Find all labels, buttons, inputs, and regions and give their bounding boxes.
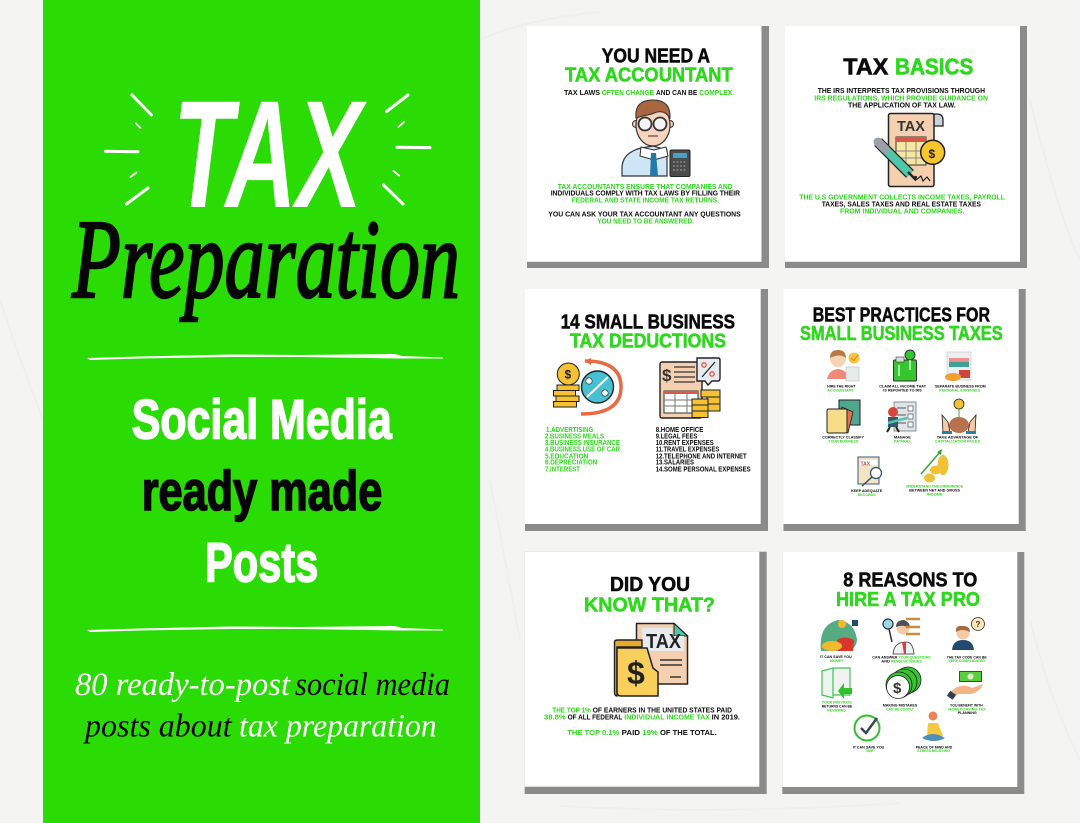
text: body copy: 38.8% [544, 713, 566, 722]
item: hire the right accountant: HIRE THE RIGHT [827, 383, 856, 388]
text: body copy: INDIVIDUAL INCOME TAX [624, 713, 710, 722]
item: can answer your questions: YOUR QUESTIONS [898, 654, 931, 659]
text: body paragraphs: FEDERAL AND STATE INCOME TAX RETURNS. [572, 196, 719, 205]
text: intro line: TAX LAWS [564, 88, 600, 97]
item: can answer your questions: RESOLVE ISSUES [891, 658, 922, 663]
text: body copy: OF THE TOTAL. [660, 728, 717, 737]
heading: 8 REASONS TO [843, 570, 977, 592]
item: mistakes can be costly: $ [893, 680, 902, 697]
item: manage payroll: PAYROLL [894, 439, 912, 444]
text: Posts: Posts [205, 531, 318, 594]
item: take advantage of capitalization rules: TAKE ADVANTAGE OF [937, 435, 979, 440]
text: body copy: 19% [642, 728, 658, 737]
text: body copy: THE TOP 1% [552, 705, 591, 714]
icon: tax document and folder [614, 624, 688, 696]
item: hire the right accountant [827, 350, 860, 392]
icon: percent circle with coins: $ [564, 368, 572, 382]
heading: DID YOU [610, 574, 690, 596]
item: mistakes can be costly: CAN BE COSTLY [886, 706, 914, 711]
icon: tax document with pen and coin: $ [928, 147, 936, 161]
text: bottom paragraph: FROM INDIVIDUAL AND COMPANIES. [840, 207, 964, 216]
text: ready made: ready made [142, 459, 382, 522]
item: previous returns can be reviewed [822, 668, 853, 712]
list: deductions 8 to 14: 13.SALARIES [656, 460, 694, 467]
list: deductions 1 to 7: 4.BUSINESS USE OF CAR [545, 447, 620, 454]
divider: upper brush line [87, 354, 443, 360]
list: deductions 8 to 14: 14.SOME PERSONAL EXPENSES [656, 466, 751, 473]
text: intro line: AND CAN BE [656, 88, 697, 97]
text: body copy [544, 705, 740, 737]
heading: BEST PRACTICES FOR [813, 305, 990, 327]
item: keep adequate records [851, 457, 883, 497]
item: money-saving tax planning: MONEY-SAVING TAX [948, 706, 986, 711]
icon: burst rays around TAX [106, 95, 430, 204]
text: body paragraphs: YOU CAN ASK YOUR TAX ACCOUNTANT ANY QUESTIONS [548, 210, 741, 219]
text: bottom paragraph [799, 192, 1006, 216]
item: separate business from personal expenses: PERSONAL EXPENSES [939, 387, 980, 392]
text: tagline line 2: tax preparation [239, 709, 437, 745]
list: deductions 1 to 7 [545, 427, 620, 473]
item: the tax code can be complicated: VERY COMPLICATED [948, 658, 985, 663]
item: it can save you money: MONEY [830, 658, 844, 663]
text: body paragraphs: INDIVIDUALS COMPLY WITH TAX LAWS BY FILLING THEIR [551, 189, 741, 198]
text: intro line: OFTEN CHANGE [602, 88, 654, 97]
item: previous returns can be reviewed: YOUR PREVIOUS [822, 700, 852, 705]
item: claim all income: IS REPORTED TO IRS [883, 387, 922, 392]
icon: tax document and folder: $ [627, 655, 645, 691]
heading: TAX DEDUCTIONS [570, 331, 726, 353]
item: previous returns can be reviewed: REVIEWED [827, 707, 846, 712]
item: separate business from personal expenses [935, 352, 986, 392]
list: deductions 1 to 7: 7.INTEREST [545, 466, 581, 473]
item: understand net and gross income: BETWEEN NET AND GROSS [909, 488, 960, 493]
heading [800, 305, 1003, 345]
item: take advantage of capitalization rules [935, 399, 980, 444]
heading: YOU NEED A [602, 45, 710, 67]
list: deductions 8 to 14: 8.HOME OFFICE [656, 427, 704, 434]
item: correctly classify your business: CORRECTLY CLASSIFY [822, 435, 864, 440]
item: keep adequate records: KEEP ADEQUATE [851, 488, 883, 493]
panel: 14 small business tax deductions [525, 289, 768, 531]
icon: percent circle with coins [554, 358, 621, 414]
item: manage payroll: MANAGE [894, 435, 911, 440]
item: previous returns can be reviewed: RETURNS CAN BE [822, 704, 853, 709]
item: money-saving tax planning: PLANNING [958, 710, 977, 715]
item: peace of mind: STRESS RELIEVING [917, 748, 950, 753]
icon: invoice with percent bubble and coins: $ [662, 366, 672, 385]
text: tagline line 1: social media [295, 667, 450, 703]
list: deductions 8 to 14: 12.TELEPHONE AND INTERNET [656, 453, 747, 460]
heading: TAX [843, 53, 889, 79]
heading [565, 45, 733, 87]
item: understand net and gross income: INCOME [927, 492, 943, 497]
item: it can save you time [853, 716, 884, 753]
item: correctly classify your business [822, 400, 864, 444]
item: mistakes can be costly [883, 667, 921, 711]
icon: tax document with pen and coin: TAX [897, 118, 925, 135]
icon: accountant with calculator [622, 100, 690, 176]
item: money-saving tax planning [947, 672, 986, 715]
text: top paragraph: IRS REGULATIONS, WHICH PROVIDE GUIDANCE ON [814, 93, 988, 102]
list: deductions 8 to 14: 9.LEGAL FEES [656, 433, 698, 440]
text: tagline line 2 [83, 709, 437, 745]
panel: 8 reasons to hire a tax pro [782, 552, 1024, 794]
item: manage payroll [887, 402, 916, 444]
item: the tax code can be complicated: ? [976, 620, 980, 629]
panel: you need a tax accountant [527, 26, 769, 268]
item: take advantage of capitalization rules: CAPITALIZATION RULES [935, 439, 980, 444]
text: top paragraph: THE APPLICATION OF TAX LAW. [848, 100, 956, 109]
text: tagline line 2: posts about [83, 709, 232, 745]
item: it can save you money [820, 620, 858, 663]
text: body copy: IN 2019. [712, 713, 740, 722]
item: can answer your questions: AND [881, 658, 890, 663]
heading [836, 570, 980, 611]
item: money-saving tax planning: YOU BENEFIT WITH [950, 703, 983, 708]
panel: best practices for small business taxes [784, 289, 1026, 531]
text: body paragraphs [548, 182, 741, 226]
divider: lower brush line [87, 626, 443, 632]
text: tagline line 1: 80 ready-to-post [75, 667, 291, 703]
list: deductions 1 to 7: 1.ADVERTISING [546, 427, 594, 434]
list: deductions 1 to 7: 3.BUSINESS INSURANCE [545, 440, 620, 447]
heading [561, 312, 735, 353]
text: body paragraphs: YOU NEED TO BE ANSWERED. [597, 217, 694, 226]
heading: SMALL BUSINESS TAXES [800, 323, 1003, 345]
text: body paragraphs: TAX ACCOUNTANTS ENSURE THAT COMPANIES AND [558, 182, 733, 191]
list: deductions 1 to 7: 6.DEPRECIATION [545, 460, 597, 467]
icon: tax document and folder: TAX [646, 631, 682, 653]
text: body copy: THE TOP 0.1% [567, 728, 620, 737]
text: body copy: PAID [622, 728, 640, 737]
text: intro line: COMPLEX. [699, 88, 734, 97]
list: deductions 8 to 14: 10.RENT EXPENSES [656, 440, 714, 447]
panel: did you know that [525, 552, 767, 794]
item: can answer your questions [872, 619, 931, 663]
item: peace of mind: PEACE OF MIND AND [916, 744, 952, 749]
panel: green title panel [43, 0, 480, 823]
item: understand net and gross income: UNDERSTAND THE DIFFERENCE [906, 484, 964, 489]
item: separate business from personal expenses: SEPARATE BUSINESS FROM [935, 383, 986, 388]
text: Social Media: Social Media [132, 387, 392, 450]
list: deductions 8 to 14: 11.TRAVEL EXPENSES [656, 447, 720, 454]
item: hire the right accountant: ACCOUNTANT [827, 387, 855, 392]
heading [843, 53, 973, 79]
item: claim all income: CLAIM ALL INCOME THAT [879, 383, 927, 388]
heading: TAX: TAX [173, 69, 367, 240]
item: it can save you time: IT CAN SAVE YOU [853, 744, 884, 749]
heading: HIRE A TAX PRO [836, 589, 980, 611]
heading: BASICS [895, 53, 973, 79]
item: understand net and gross income [906, 449, 964, 497]
icon: tax document with pen and coin [878, 114, 945, 186]
list: deductions 8 to 14 [656, 427, 751, 473]
item: keep adequate records: RECORDS [858, 492, 876, 497]
heading: KNOW THAT? [584, 595, 715, 617]
item: peace of mind [916, 712, 952, 753]
text: bottom paragraph: THE U.S GOVERNMENT COLLECTS INCOME TAXES, PAYROLL [799, 192, 1006, 201]
heading [584, 574, 715, 617]
item: the tax code can be complicated: THE TAX CODE CAN BE [947, 654, 987, 659]
heading: Preparation: Preparation [71, 198, 460, 322]
item: claim all income [879, 350, 927, 392]
item: keep adequate records: TAX [860, 462, 871, 468]
item: it can save you time: TIME [865, 748, 874, 753]
item: the tax code can be complicated [947, 618, 987, 663]
text: tagline line 1 [75, 667, 450, 703]
item: it can save you money: IT CAN SAVE YOU [820, 654, 852, 659]
item: correctly classify your business: YOUR BUSINESS [828, 439, 859, 444]
item: mistakes can be costly: MAKING MISTAKES [883, 703, 918, 708]
text: intro line [564, 88, 734, 97]
text: body copy: OF EARNERS IN THE UNITED STATES PAID [593, 705, 732, 714]
item: can answer your questions: CAN ANSWER [872, 654, 897, 659]
list: deductions 1 to 7: 5.EDUCATION [545, 453, 588, 460]
panel: tax basics [785, 26, 1027, 268]
heading: TAX ACCOUNTANT [565, 65, 733, 87]
text: top paragraph [814, 86, 988, 109]
icon: invoice with percent bubble and coins [660, 358, 720, 418]
text: bottom paragraph: TAXES, SALES TAXES AND REAL ESTATE TAXES [822, 200, 981, 209]
list: deductions 1 to 7: 2.BUSINESS MEALS [545, 433, 604, 440]
text: top paragraph: THE IRS INTERPRETS TAX PROVISIONS THROUGH [818, 86, 985, 95]
text: body copy: OF ALL FEDERAL [568, 713, 623, 722]
heading: 14 SMALL BUSINESS [561, 312, 735, 334]
